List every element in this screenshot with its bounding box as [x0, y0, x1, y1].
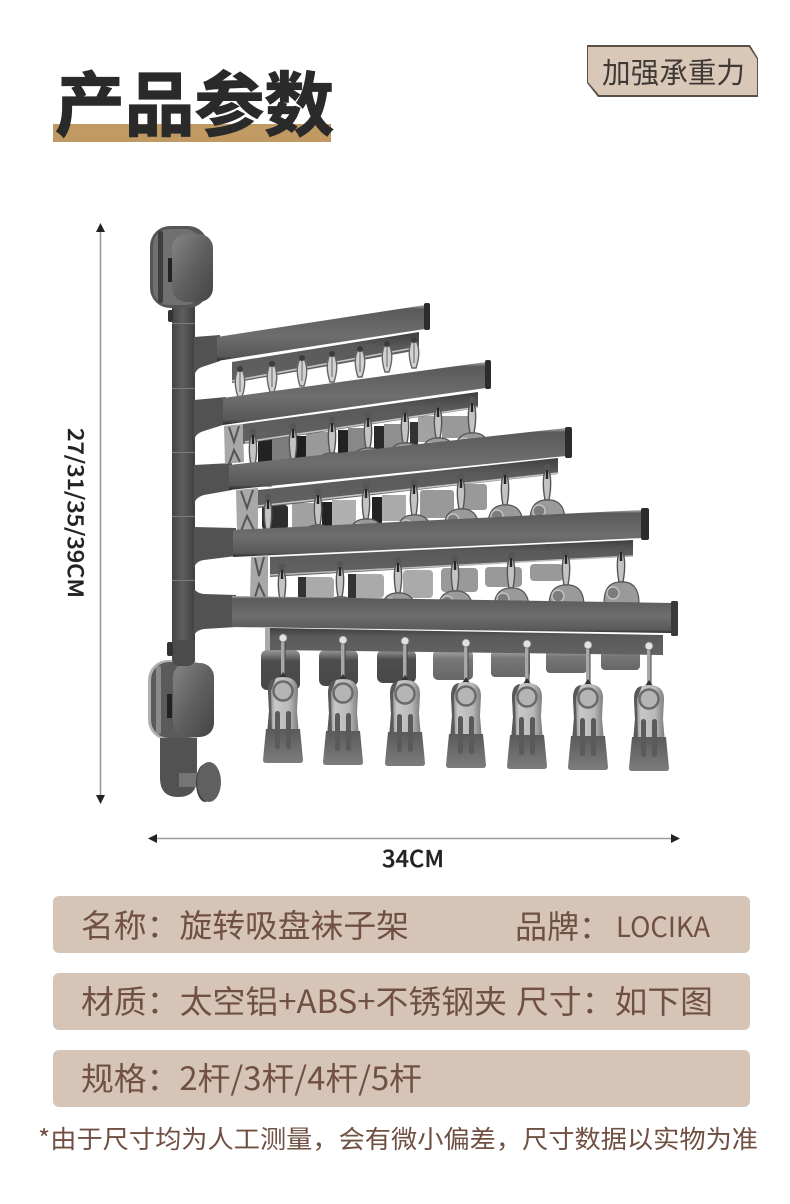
- bar 4: [233, 508, 649, 557]
- bottom hook: [160, 738, 221, 802]
- spec row: name and brand: [53, 896, 750, 953]
- product: rotating sock rack: [148, 226, 678, 802]
- material: 材质：太空铝+ABS+不锈钢夹: [81, 977, 507, 1023]
- width arrow line: [152, 838, 675, 840]
- height arrow heads: [96, 223, 105, 804]
- silver side clip 5: [265, 628, 271, 652]
- wall post: [172, 300, 195, 666]
- back clips 3: [262, 484, 487, 529]
- back clips 2: [258, 416, 472, 464]
- arm connectors: [194, 335, 236, 636]
- height dimension: [61, 223, 105, 804]
- spec row: material and size: [53, 973, 750, 1030]
- bar 5: [232, 596, 678, 636]
- row 1: hooks and rail: [232, 332, 419, 397]
- width label: 34CM: [382, 840, 444, 874]
- row 3: clips, hooks and rail: [236, 458, 565, 551]
- bar 2: [223, 360, 491, 425]
- badge: reinforced load capacity: 加强承重力: [602, 50, 745, 92]
- width dimension: [148, 834, 680, 874]
- name: 名称：旋转吸盘袜子架: [81, 901, 409, 947]
- rail 2: [243, 392, 478, 444]
- footnote: *由于尺寸均为人工测量，会有微小偏差，尺寸数据以实物为准: [38, 1120, 758, 1156]
- silver side clip 2: [224, 424, 244, 464]
- back clips 4: [298, 564, 563, 599]
- spec row: variants: [53, 1050, 750, 1107]
- badge: reinforced load capacity: [587, 45, 758, 97]
- bar 1: [217, 303, 430, 361]
- bar 3: [229, 427, 572, 490]
- silver side clip 3: [236, 488, 258, 532]
- title underline band: [53, 124, 331, 142]
- back clips 5: [261, 650, 640, 690]
- row 5: back clips and rail: [261, 628, 663, 690]
- spec row: name and brand: LOCIKA: [616, 906, 710, 946]
- title text: 产品参数: [55, 50, 334, 151]
- front clips: [263, 634, 669, 771]
- title: [53, 50, 334, 151]
- row 2: clips, hooks and rail: [224, 392, 490, 486]
- post seams: [172, 324, 195, 644]
- rail 3: [258, 458, 558, 508]
- size: 尺寸：如下图: [516, 977, 713, 1023]
- brand: 品牌：: [515, 902, 611, 948]
- height arrow line: [100, 228, 102, 800]
- top suction cup: [150, 226, 213, 322]
- height label: 27/31/35/39CM: [61, 428, 91, 598]
- silver side clip 4: [250, 556, 268, 598]
- row 4: clips, hooks and rail: [250, 540, 639, 621]
- spec row: variants: 规格：2杆/3杆/4杆/5杆: [81, 1054, 422, 1100]
- width arrow heads: [148, 834, 680, 843]
- rail 4: [270, 540, 633, 577]
- rail 1: [232, 332, 419, 383]
- rail 5: [270, 628, 663, 655]
- bottom suction cup: [148, 640, 214, 740]
